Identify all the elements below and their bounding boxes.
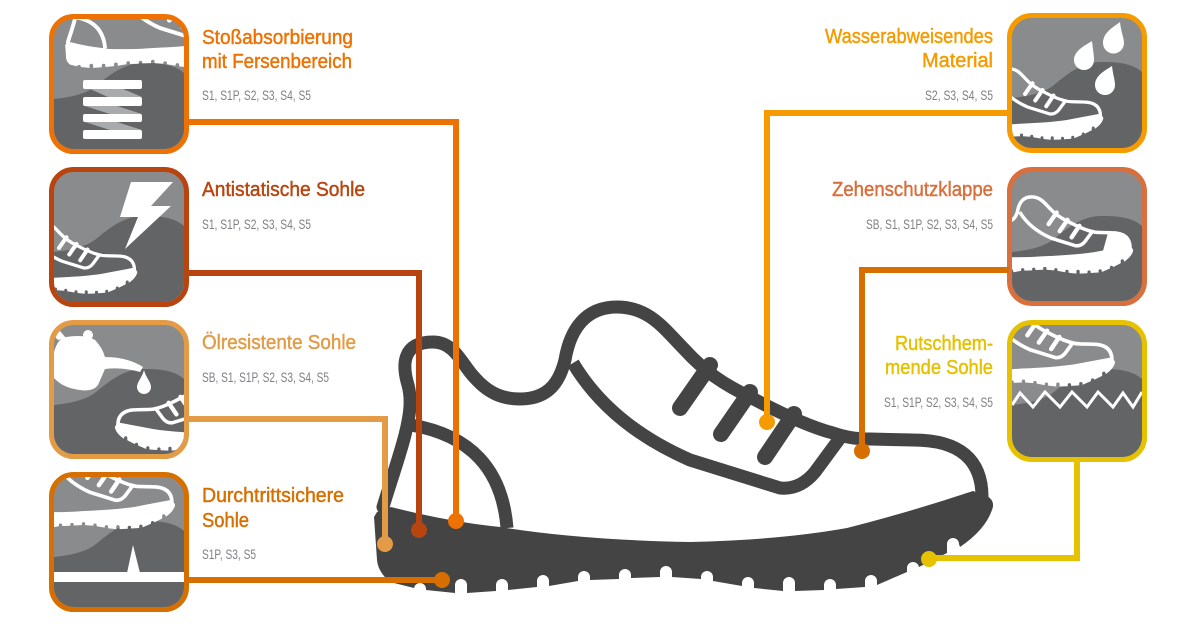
text: norms: S1P, S3, S5	[202, 547, 256, 562]
icon: shoe	[1012, 67, 1104, 140]
icon: oil can	[54, 330, 151, 394]
panel: Wasserabweisendes Material icon	[1007, 13, 1147, 153]
heading: Ölresistente Sohle: Ölresistente Sohle	[202, 332, 356, 354]
text: norms: S1, S1P, S2, S3, S4, S5	[202, 217, 311, 232]
shoe illustration	[374, 307, 993, 593]
icon: nail and plate	[54, 545, 184, 582]
panel: Zehenschutzklappe icon	[1007, 167, 1147, 306]
heading: Wasserabweisendes: Wasserabweisendes	[825, 26, 993, 48]
connector: Ölresistente Sohle	[187, 419, 390, 549]
icon: shoe mirrored	[114, 394, 184, 451]
icon: oil drop	[137, 370, 151, 394]
icon: shoe	[1012, 325, 1115, 386]
icon: shoe heel	[65, 19, 184, 68]
panel: Stoßabsorbierung icon	[49, 14, 189, 154]
icon: zigzag ground	[1012, 392, 1142, 407]
panel: Ölresistente Sohle icon	[49, 320, 189, 459]
icon: spring	[83, 80, 142, 139]
heading: mende Sohle: mende Sohle	[885, 357, 993, 379]
panel: Durchtrittsichere Sohle icon	[49, 472, 189, 612]
connector: Antistatische Sohle	[187, 273, 424, 535]
panel: Rutschhemmende Sohle icon	[1007, 320, 1147, 462]
heading: Rutschhem-: Rutschhem-	[895, 333, 993, 355]
connector: Rutschhemmende Sohle	[924, 460, 1077, 564]
heading: Stoßabsorbierung: Stoßabsorbierung	[202, 27, 353, 49]
connector: Durchtrittsichere Sohle	[187, 575, 447, 585]
heading: Durchtrittsichere: Durchtrittsichere	[202, 485, 344, 507]
icon: water drops	[1074, 22, 1124, 95]
icon: shoe with toe cap	[1012, 195, 1134, 274]
heading: Material: Material	[922, 50, 993, 72]
icon: lightning bolt	[120, 182, 173, 249]
text: norms: SB, S1, S1P, S2, S3, S4, S5	[202, 370, 329, 385]
text: norms: S1, S1P, S2, S3, S4, S5	[202, 88, 311, 103]
connector: Zehenschutzklappe	[857, 270, 1009, 456]
icon: shoe	[54, 477, 175, 530]
connector: Stoßabsorbierung	[187, 122, 461, 526]
text: norms: S2, S3, S4, S5	[925, 88, 993, 103]
heading: mit Fersenbereich: mit Fersenbereich	[202, 51, 352, 73]
connector: Wasserabweisendes Material	[762, 113, 1009, 427]
heading: Antistatische Sohle: Antistatische Sohle	[202, 179, 365, 201]
text: norms: SB, S1, S1P, S2, S3, S4, S5	[866, 217, 993, 232]
text: norms: S1, S1P, S2, S3, S4, S5	[884, 395, 993, 410]
panel: Antistatische Sohle icon	[49, 167, 189, 307]
icon: shoe	[54, 225, 138, 294]
heading: Sohle: Sohle	[202, 510, 249, 532]
heading: Zehenschutzklappe: Zehenschutzklappe	[832, 179, 993, 201]
